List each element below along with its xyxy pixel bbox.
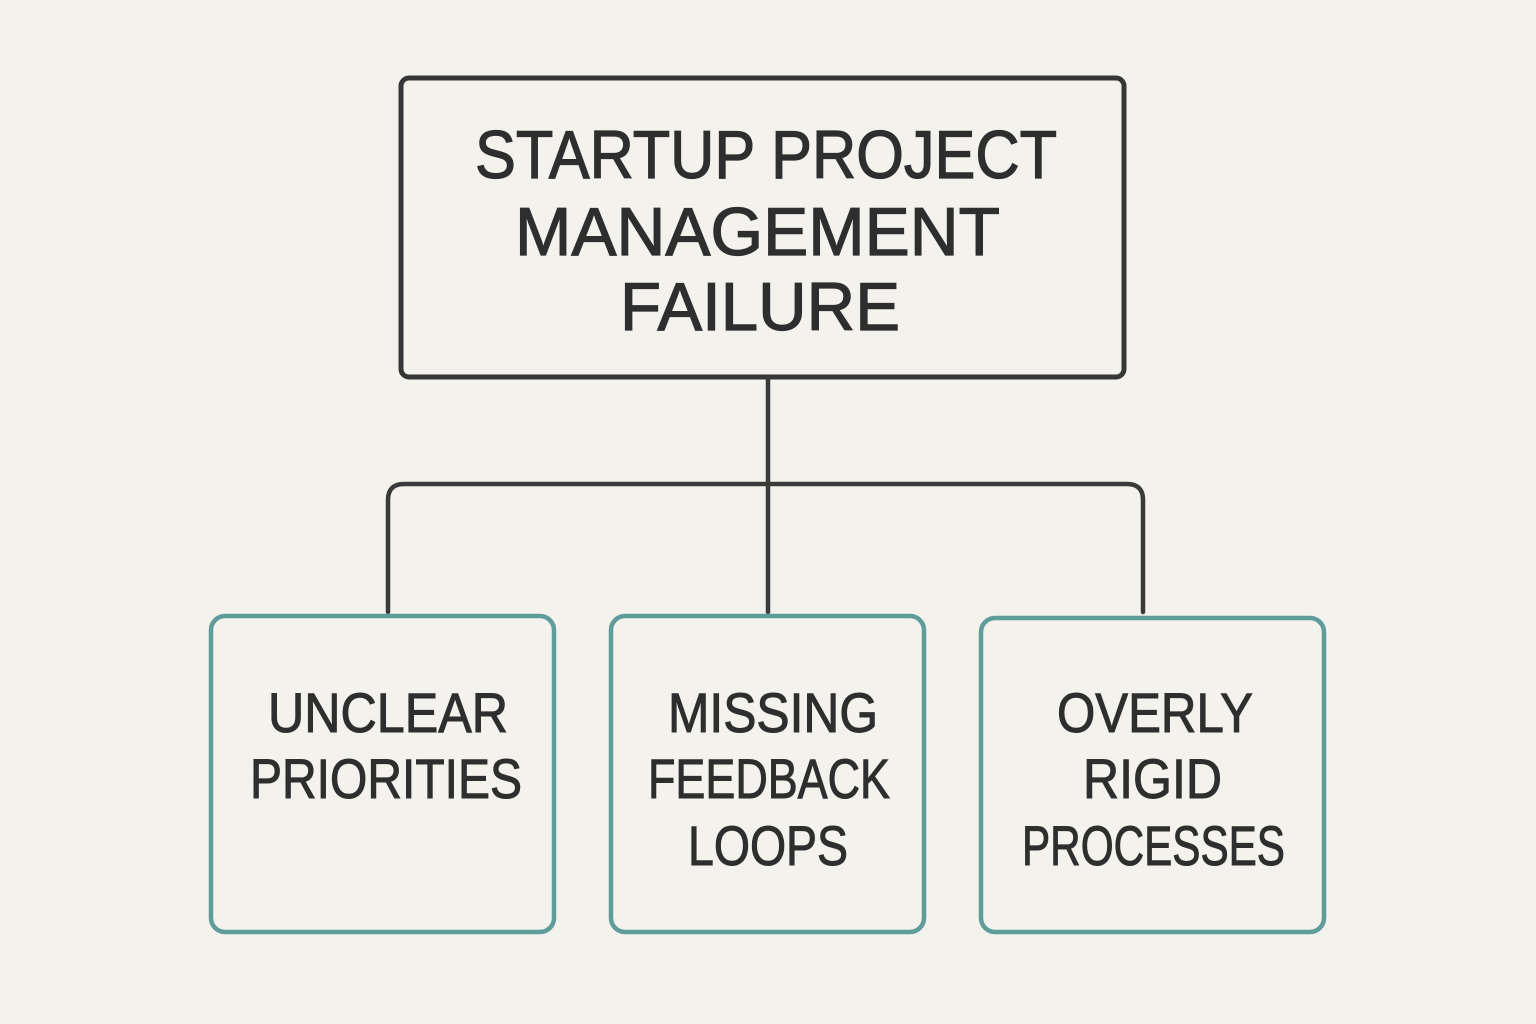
panel: overly rigid processes: OVERLY [1057,681,1253,744]
title text: MANAGEMENT [515,194,1000,270]
title text [475,117,1057,345]
title text: FAILURE [620,269,900,345]
panel: unclear priorities: UNCLEAR [268,681,508,744]
title box [401,78,1124,377]
panel: missing feedback loops: MISSING [668,681,878,744]
connector lines [388,378,1143,612]
panel: missing feedback loops: LOOPS [688,814,848,877]
panel: overly rigid processes: RIGID [1083,747,1222,810]
panel: unclear priorities: PRIORITIES [250,747,522,810]
panel: overly rigid processes [981,618,1324,932]
panel: missing feedback loops [611,616,924,932]
panel: missing feedback loops: FEEDBACK [648,747,890,810]
title text: STARTUP PROJECT [475,117,1057,193]
panel: unclear priorities [211,616,554,932]
panel: overly rigid processes: PROCESSES [1022,814,1285,877]
